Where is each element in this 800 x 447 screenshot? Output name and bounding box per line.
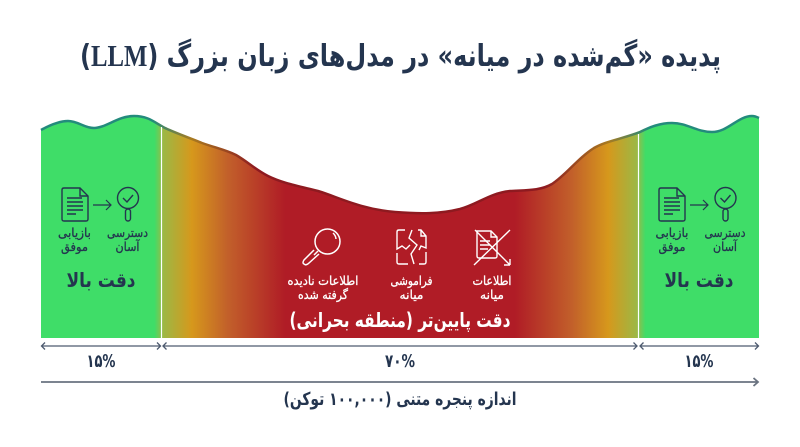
label: successful retrieval: موفق <box>61 239 88 255</box>
panel: right high accuracy <box>656 188 746 292</box>
label: easy access: آسان <box>116 239 140 254</box>
icon: magnifier <box>303 229 340 265</box>
label: middle forgetting: میانه <box>400 287 424 302</box>
icon: crossed document <box>474 230 510 265</box>
arrow: right 15% span <box>640 342 758 350</box>
label: middle information: اطلاعات <box>472 273 512 288</box>
label: right 15%: ۱۵% <box>684 351 714 372</box>
label: middle information: میانه <box>480 287 504 302</box>
label: high accuracy: دقت بالا <box>664 268 734 292</box>
label: successful retrieval <box>656 225 688 255</box>
label: easy access: دسترسی <box>107 225 148 241</box>
icon: magnifier with check <box>118 188 138 221</box>
label: easy access: دسترسی <box>704 225 746 241</box>
label: successful retrieval <box>58 225 91 255</box>
icon: arrow <box>93 200 111 210</box>
arrow: middle 70% span <box>163 342 637 350</box>
arrow: context window size <box>41 378 758 386</box>
label: overlooked information: گرفته شده <box>298 287 348 303</box>
label: high accuracy: دقت بالا <box>66 268 136 292</box>
label: middle information <box>472 273 512 302</box>
label: successful retrieval: بازیابی <box>58 225 91 241</box>
label: overlooked information <box>288 273 358 303</box>
label: lower accuracy critical zone: دقت پایین‌تر (منطقه بحرانی) <box>290 308 510 333</box>
icon: document <box>62 188 88 221</box>
label: overlooked information: اطلاعات نادیده <box>288 273 358 288</box>
label: easy access: آسان <box>713 239 737 254</box>
panel: left high accuracy <box>58 188 148 292</box>
label: easy access <box>107 225 148 254</box>
icon: broken document <box>397 230 426 264</box>
label: left 15%: ۱۵% <box>86 351 116 372</box>
label: successful retrieval: موفق <box>658 239 686 255</box>
icon: document <box>659 188 685 221</box>
label: easy access <box>704 225 746 254</box>
chart: accuracy curve area <box>41 116 759 338</box>
panel: critical zone <box>288 229 512 333</box>
arrow: left 15% span <box>42 342 160 350</box>
icon: arrow <box>690 200 708 210</box>
label: middle forgetting: فراموشی <box>390 273 433 289</box>
label: middle 70%: ۷۰% <box>385 351 415 372</box>
label: middle forgetting <box>390 273 433 302</box>
icon: magnifier with check <box>715 188 736 221</box>
label: context window size: اندازه پنجره متنی (۱۰۰,۰۰۰ توکن) <box>284 389 516 410</box>
label: successful retrieval: بازیابی <box>656 225 688 241</box>
